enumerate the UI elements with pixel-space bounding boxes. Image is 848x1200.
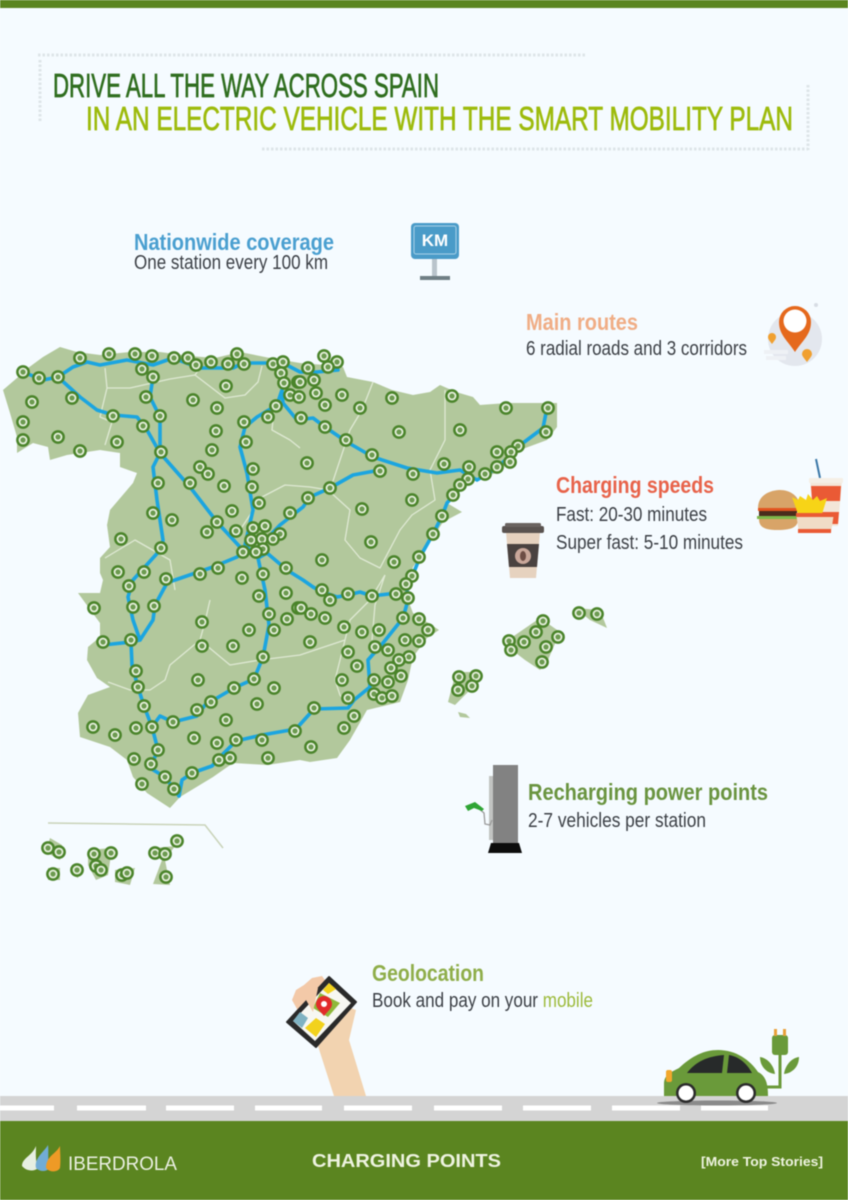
text: geolocation: Book and pay on your mobile	[372, 990, 593, 1012]
icon: burger, fries and drink	[757, 459, 843, 533]
icon: coffee cup	[502, 523, 544, 578]
title block: DRIVE ALL THE WAY ACROSS SPAIN	[53, 67, 439, 104]
icon: hand holding phone	[287, 976, 366, 1096]
text: main routes	[526, 309, 747, 360]
text: recharging power points: Recharging power points	[528, 779, 768, 805]
text: charging speeds	[556, 472, 743, 554]
Balearic and Canary islands	[46, 608, 607, 885]
title block	[38, 55, 808, 150]
text: recharging power points	[528, 779, 768, 832]
text: geolocation	[372, 960, 593, 1012]
icon: km sign: KM	[422, 231, 448, 250]
top bar	[0, 0, 848, 8]
text: nationwide coverage	[134, 229, 334, 274]
map of Spain	[3, 347, 607, 885]
text: charging speeds: Super fast: 5-10 minutes	[556, 532, 743, 554]
footer link: [More Top Stories]	[701, 1155, 823, 1169]
charging station markers	[16, 347, 604, 884]
text: nationwide coverage: Nationwide coverage	[134, 229, 334, 255]
text: nationwide coverage: One station every 100 km	[134, 252, 328, 274]
logo: Iberdrola	[22, 1145, 177, 1175]
icon: km sign	[411, 223, 459, 280]
mainland shape	[3, 347, 557, 808]
logo: Iberdrola: IBERDROLA	[68, 1154, 177, 1175]
text: main routes: Main routes	[526, 309, 638, 335]
text: geolocation: Geolocation	[372, 960, 484, 986]
text: recharging power points: 2-7 vehicles per station	[528, 810, 706, 832]
footer title: CHARGING POINTS	[312, 1151, 501, 1171]
text: charging speeds: Fast: 20-30 minutes	[556, 504, 707, 526]
regional boundaries	[100, 366, 445, 708]
canary islands divider	[48, 823, 223, 848]
highways	[23, 358, 547, 796]
footer band	[0, 1121, 848, 1200]
icon: electric car with plug	[657, 1029, 799, 1106]
icon: charging station	[465, 765, 522, 853]
road	[0, 1096, 848, 1121]
text: charging speeds: Charging speeds	[556, 472, 714, 498]
text: main routes: 6 radial roads and 3 corridors	[526, 338, 747, 360]
icon: location pin	[764, 303, 822, 366]
